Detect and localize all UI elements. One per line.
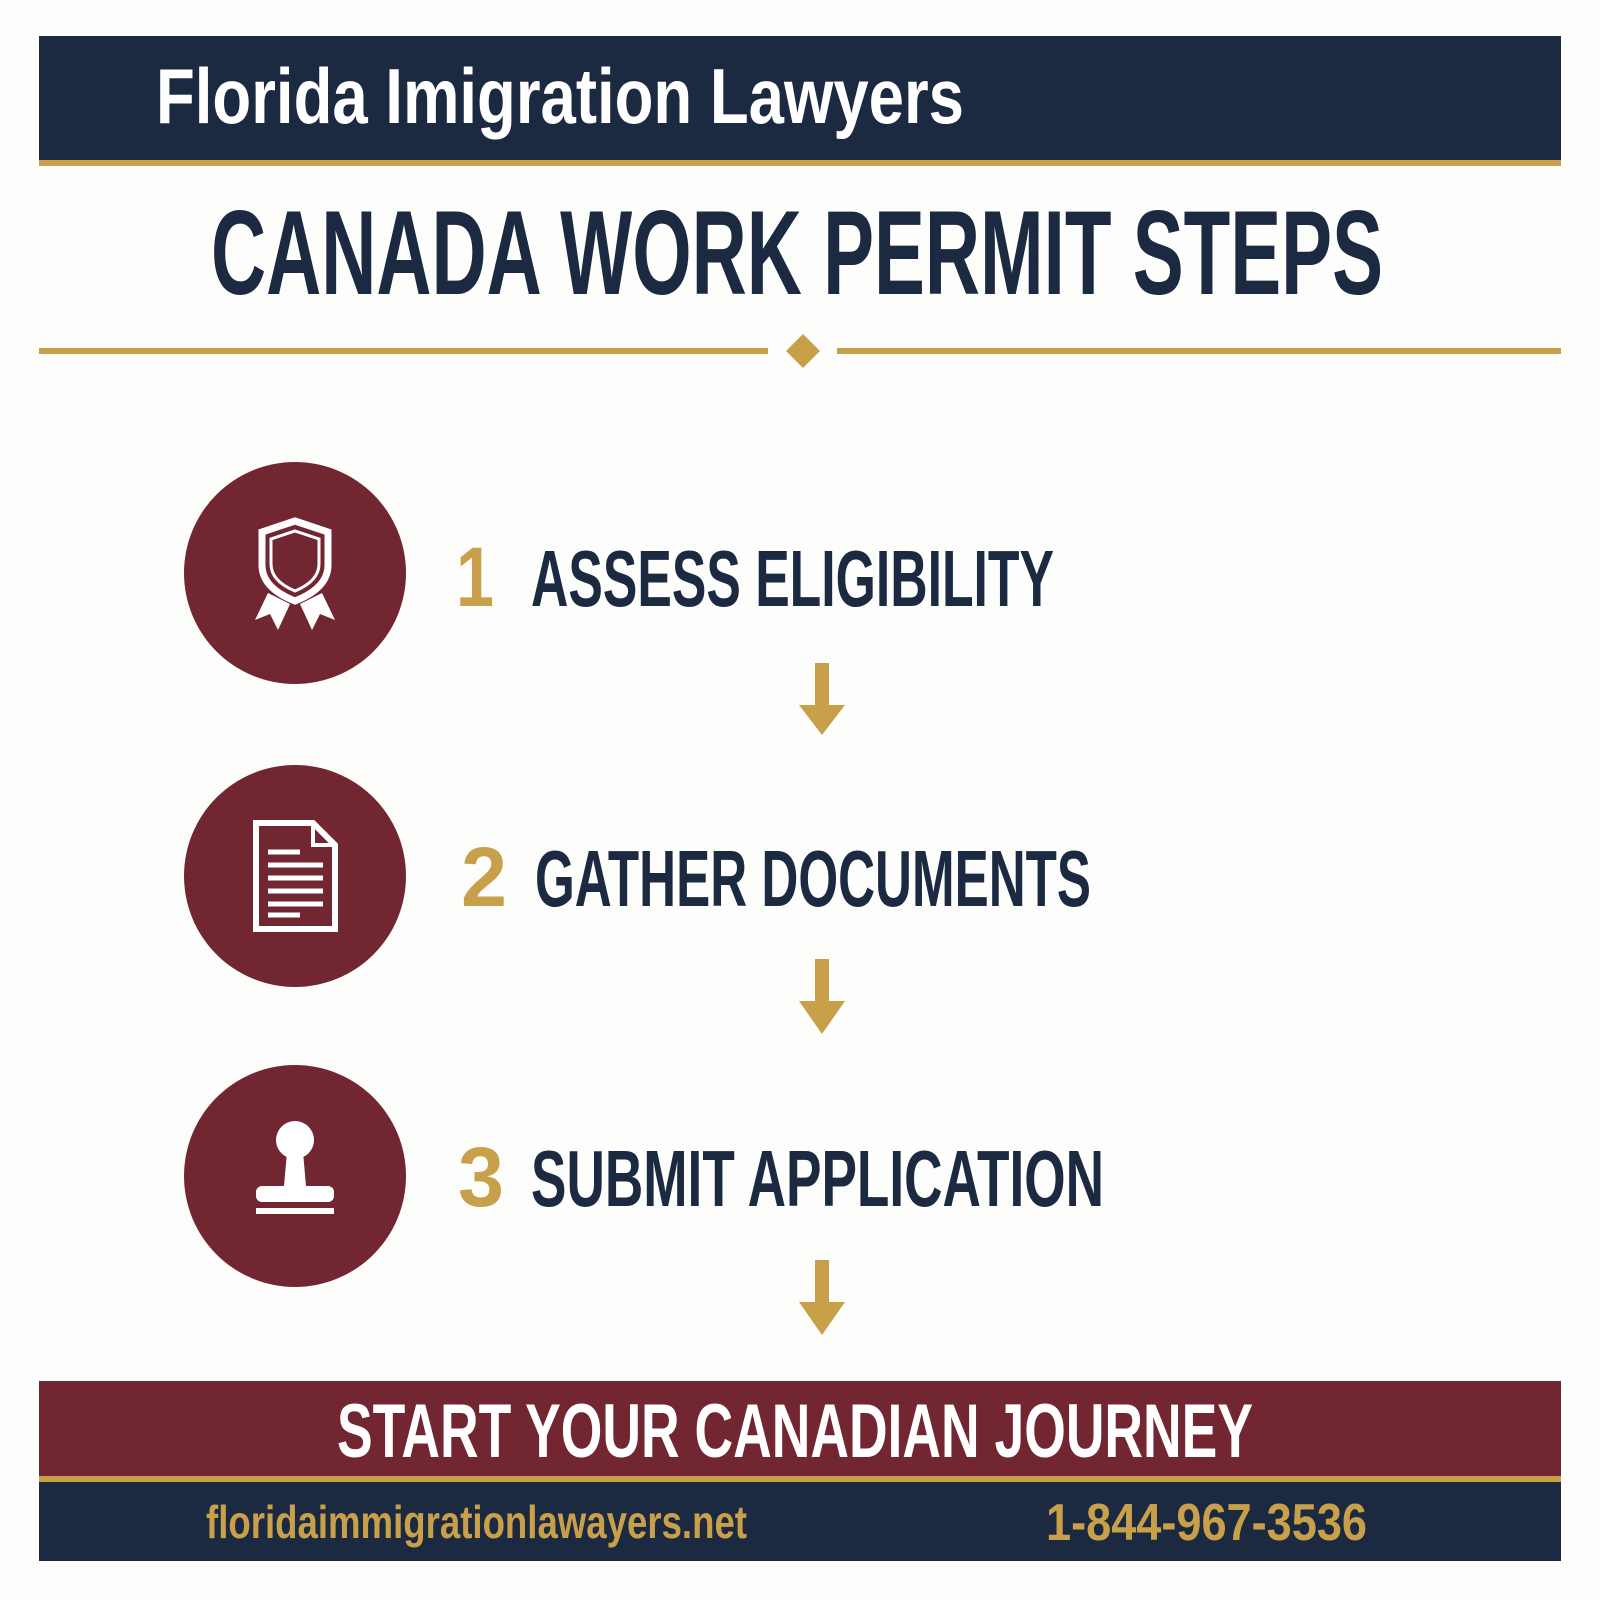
step number 3: 3 [458,1130,504,1224]
step number 2: 2 [461,830,507,924]
step number 1: 1 [456,530,494,624]
step 3 [184,1065,1104,1287]
footer call to action: START YOUR CANADIAN JOURNEY [337,1389,1253,1474]
step 2 [184,765,1091,987]
icon: stamp [184,1065,406,1287]
header bar [39,36,1561,166]
icon: shield award [184,462,406,684]
phone: 1-844-967-3536 [1046,1494,1367,1552]
icon: document [184,765,406,987]
arrow 2 [799,959,845,1034]
arrow 3 [799,1260,845,1335]
title divider [39,334,1561,368]
step 1 [184,462,1054,684]
arrow 1 [799,663,845,735]
footer contact bar [39,1482,1561,1561]
step label 1: ASSESS ELIGIBILITY [531,534,1054,623]
step label 3: SUBMIT APPLICATION [531,1134,1104,1223]
website: floridaimmigrationlawayers.net [206,1496,747,1548]
step label 2: GATHER DOCUMENTS [535,834,1091,923]
header text: Florida Imigration Lawyers [156,52,964,140]
